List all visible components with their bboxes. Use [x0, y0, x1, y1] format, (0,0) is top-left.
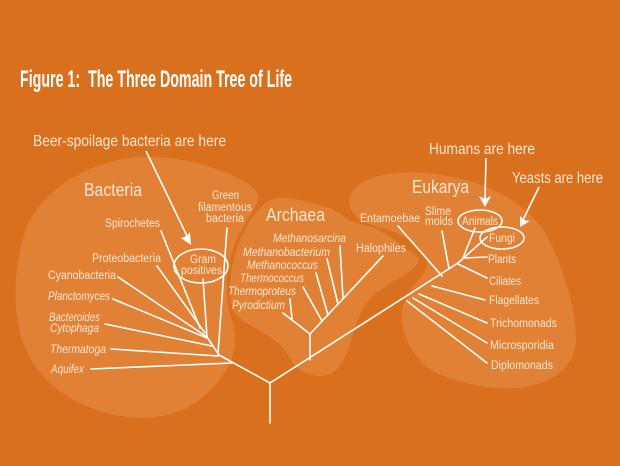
callout: yeasts: Yeasts are here — [512, 170, 603, 187]
group: bacteria labels — [48, 179, 252, 376]
label: Green filamentous bacteria: filamentous — [198, 202, 252, 214]
panel: eukarya region — [349, 172, 576, 388]
panel: bacteria region — [15, 157, 258, 418]
panel: archaea region — [230, 198, 418, 376]
archaea branches — [283, 246, 383, 334]
label: Plants: Plants — [488, 254, 516, 266]
heading: Bacteria: Bacteria — [84, 179, 143, 200]
eukarya branches — [398, 226, 487, 363]
bacteria branches — [91, 228, 232, 369]
callout: beer-spoilage bacteria — [33, 133, 226, 245]
arrow: to gram positives — [146, 151, 191, 245]
label: Halophiles: Halophiles — [356, 243, 406, 255]
label: Bacteroides: Bacteroides — [49, 312, 100, 324]
label: Thermatoga: Thermatoga — [50, 344, 106, 356]
heading: Eukarya: Eukarya — [412, 176, 470, 197]
label: Animals circled: Animals — [462, 216, 498, 228]
label: Entamoebae: Entamoebae — [360, 213, 420, 225]
root and main branches — [207, 263, 458, 423]
label: Slime molds — [425, 206, 453, 228]
label: Green filamentous bacteria — [198, 190, 252, 225]
group: eukarya labels — [360, 176, 557, 372]
label: Green filamentous bacteria: bacteria — [206, 213, 245, 225]
group: archaea labels — [228, 204, 406, 312]
label: Aquifex: Aquifex — [50, 364, 85, 376]
label: Fungi circled — [480, 227, 524, 249]
label: Gram positives circled: Gram — [190, 254, 216, 266]
arrow: to animals — [479, 158, 491, 207]
label: Cytophaga: Cytophaga — [50, 323, 99, 335]
label: Methanobacterium: Methanobacterium — [243, 247, 330, 259]
label: Microsporidia: Microsporidia — [490, 340, 555, 352]
label: Thermoproteus: Thermoproteus — [228, 286, 296, 298]
label: Trichomonads: Trichomonads — [490, 318, 557, 330]
label: Ciliates: Ciliates — [489, 276, 521, 288]
label: Flagellates: Flagellates — [489, 295, 539, 307]
callout: humans: Humans are here — [429, 141, 535, 158]
title: Figure 1: The Three Domain Tree of Life — [20, 66, 292, 93]
label: Slime molds: molds — [425, 216, 453, 228]
label: Methanosarcina: Methanosarcina — [273, 233, 346, 245]
phylogenetic tree — [91, 226, 487, 423]
label: Slime molds: Slime — [425, 206, 451, 218]
label: Pyrodictium: Pyrodictium — [232, 300, 285, 312]
label: Cyanobacteria: Cyanobacteria — [48, 270, 117, 282]
label: Spirochetes: Spirochetes — [105, 218, 160, 230]
label: Planctomyces: Planctomyces — [48, 291, 110, 303]
label: Methanococcus: Methanococcus — [247, 260, 318, 272]
label: Gram positives circled — [174, 249, 228, 283]
label: Thermococcus: Thermococcus — [240, 273, 304, 285]
arrow: to fungi — [520, 187, 539, 227]
heading: Archaea: Archaea — [266, 204, 326, 225]
label: Diplomonads: Diplomonads — [491, 360, 553, 372]
label: Fungi circled: Fungi — [489, 233, 515, 245]
callout: yeasts — [512, 170, 603, 227]
label: Green filamentous bacteria: Green — [212, 190, 239, 202]
callout: humans — [429, 141, 535, 207]
label: Gram positives circled: positives — [181, 265, 222, 277]
label: Animals circled — [458, 210, 502, 232]
label: Proteobacteria: Proteobacteria — [92, 253, 162, 265]
callout: beer-spoilage bacteria: Beer-spoilage bacteria are here — [33, 133, 226, 150]
